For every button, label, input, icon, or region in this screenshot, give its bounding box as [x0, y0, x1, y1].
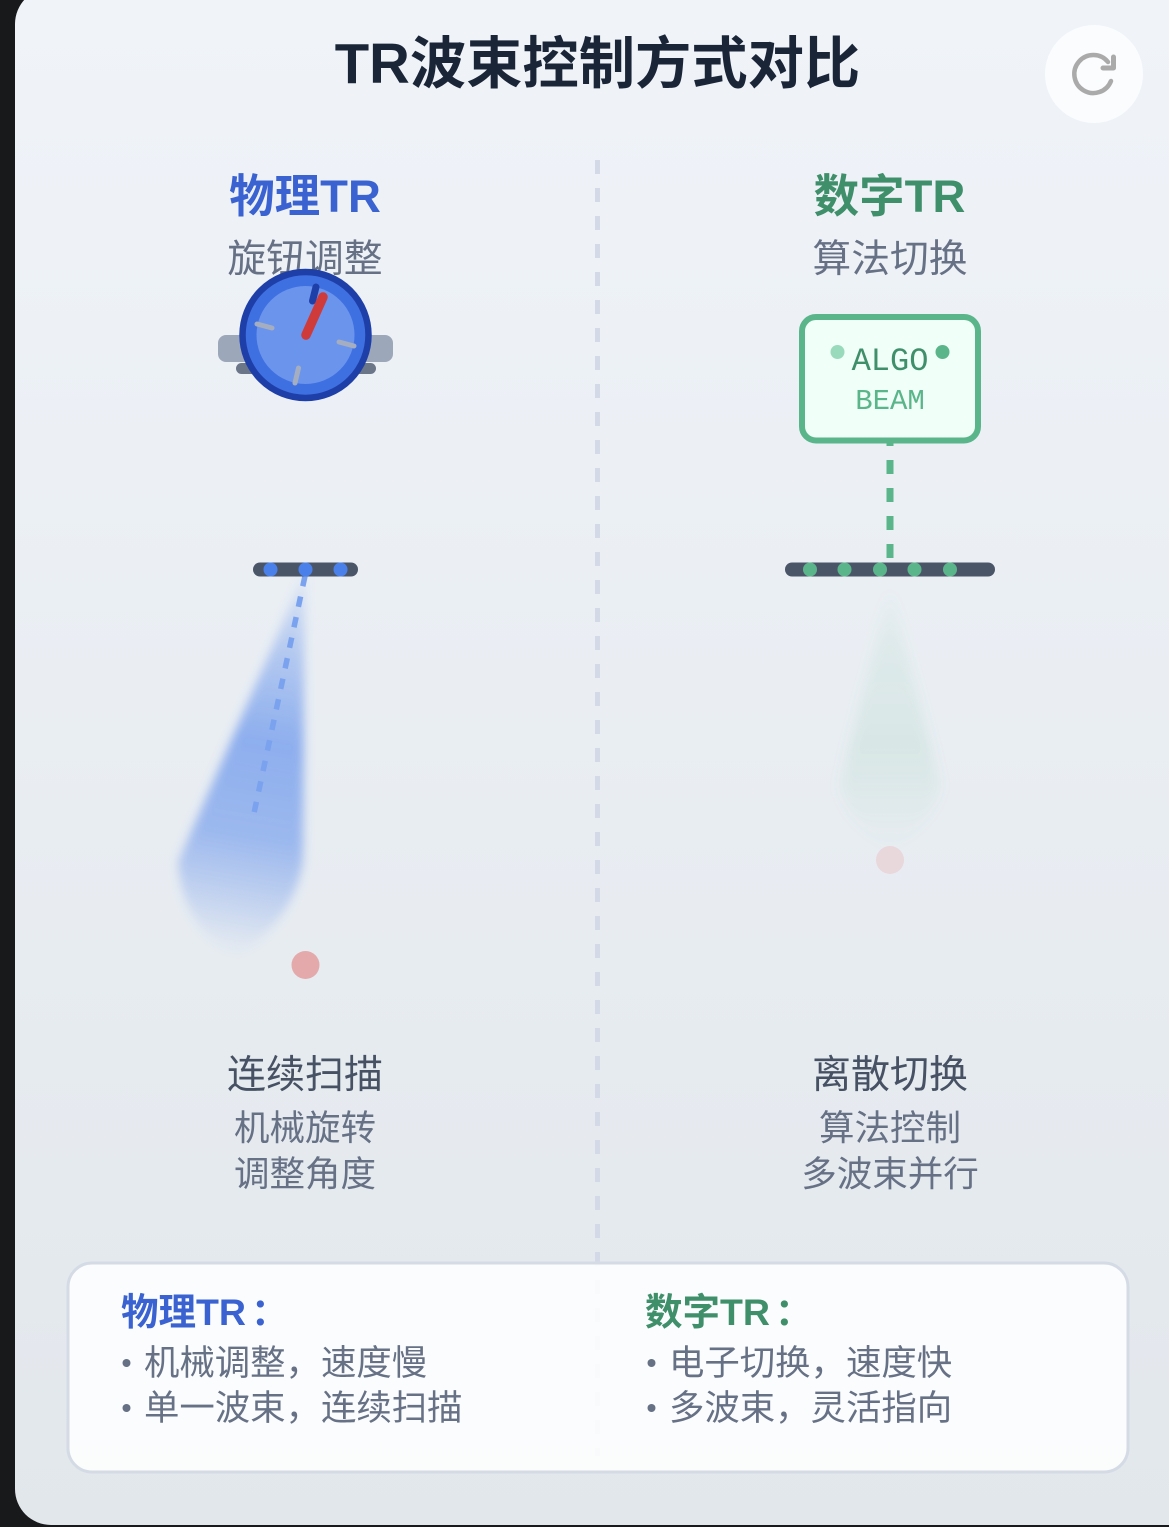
heading: physical TR: 旋钮调整: [227, 238, 383, 281]
beam: digital TR: [840, 590, 940, 850]
heading: digital TR: 数字TR: [814, 171, 965, 222]
legend: digital TR: 电子切换，速度快: [669, 1343, 952, 1383]
target: digital TR: [876, 846, 904, 874]
text: physical TR behaviour: 机械旋转: [234, 1108, 376, 1148]
title: TR波束控制方式对比: [335, 32, 860, 95]
text: physical TR behaviour: 调整角度: [234, 1154, 376, 1194]
connector: chip to array: [886, 432, 894, 558]
antenna array: digital TR: [785, 562, 995, 576]
icon: algorithm chip: BEAM: [855, 385, 925, 418]
text: physical TR behaviour: 连续扫描: [227, 1054, 383, 1097]
heading: physical TR: 物理TR: [229, 171, 381, 222]
icon: refresh button: [1045, 25, 1143, 123]
icon: mechanical knob: [218, 272, 393, 398]
text: digital TR behaviour: [801, 1054, 979, 1194]
text: physical TR behaviour: [227, 1054, 383, 1194]
panel: summary legend: [68, 1263, 1128, 1472]
legend: digital TR: 多波束，灵活指向: [669, 1388, 952, 1428]
heading: digital TR: [812, 171, 968, 281]
icon: algorithm chip: [802, 317, 978, 440]
centre dashed divider: [595, 160, 600, 1456]
legend: physical TR: 机械调整，速度慢: [144, 1343, 427, 1383]
antenna array: physical TR: [253, 562, 358, 576]
beam direction line: [254, 576, 305, 813]
target: physical TR: [292, 951, 320, 979]
legend: digital TR: [645, 1291, 952, 1428]
legend: digital TR: 数字TR：: [645, 1291, 812, 1333]
text: digital TR behaviour: 多波束并行: [801, 1154, 979, 1194]
legend: physical TR: [121, 1291, 463, 1428]
beam: physical TR: [178, 572, 305, 956]
text: digital TR behaviour: 离散切换: [812, 1054, 968, 1097]
legend: physical TR: 物理TR：: [121, 1291, 288, 1333]
text: digital TR behaviour: 算法控制: [819, 1108, 961, 1148]
heading: digital TR: 算法切换: [812, 238, 968, 281]
legend: physical TR: 单一波束，连续扫描: [144, 1388, 463, 1428]
icon: algorithm chip: ALGO: [852, 343, 928, 380]
heading: physical TR: [227, 171, 383, 281]
